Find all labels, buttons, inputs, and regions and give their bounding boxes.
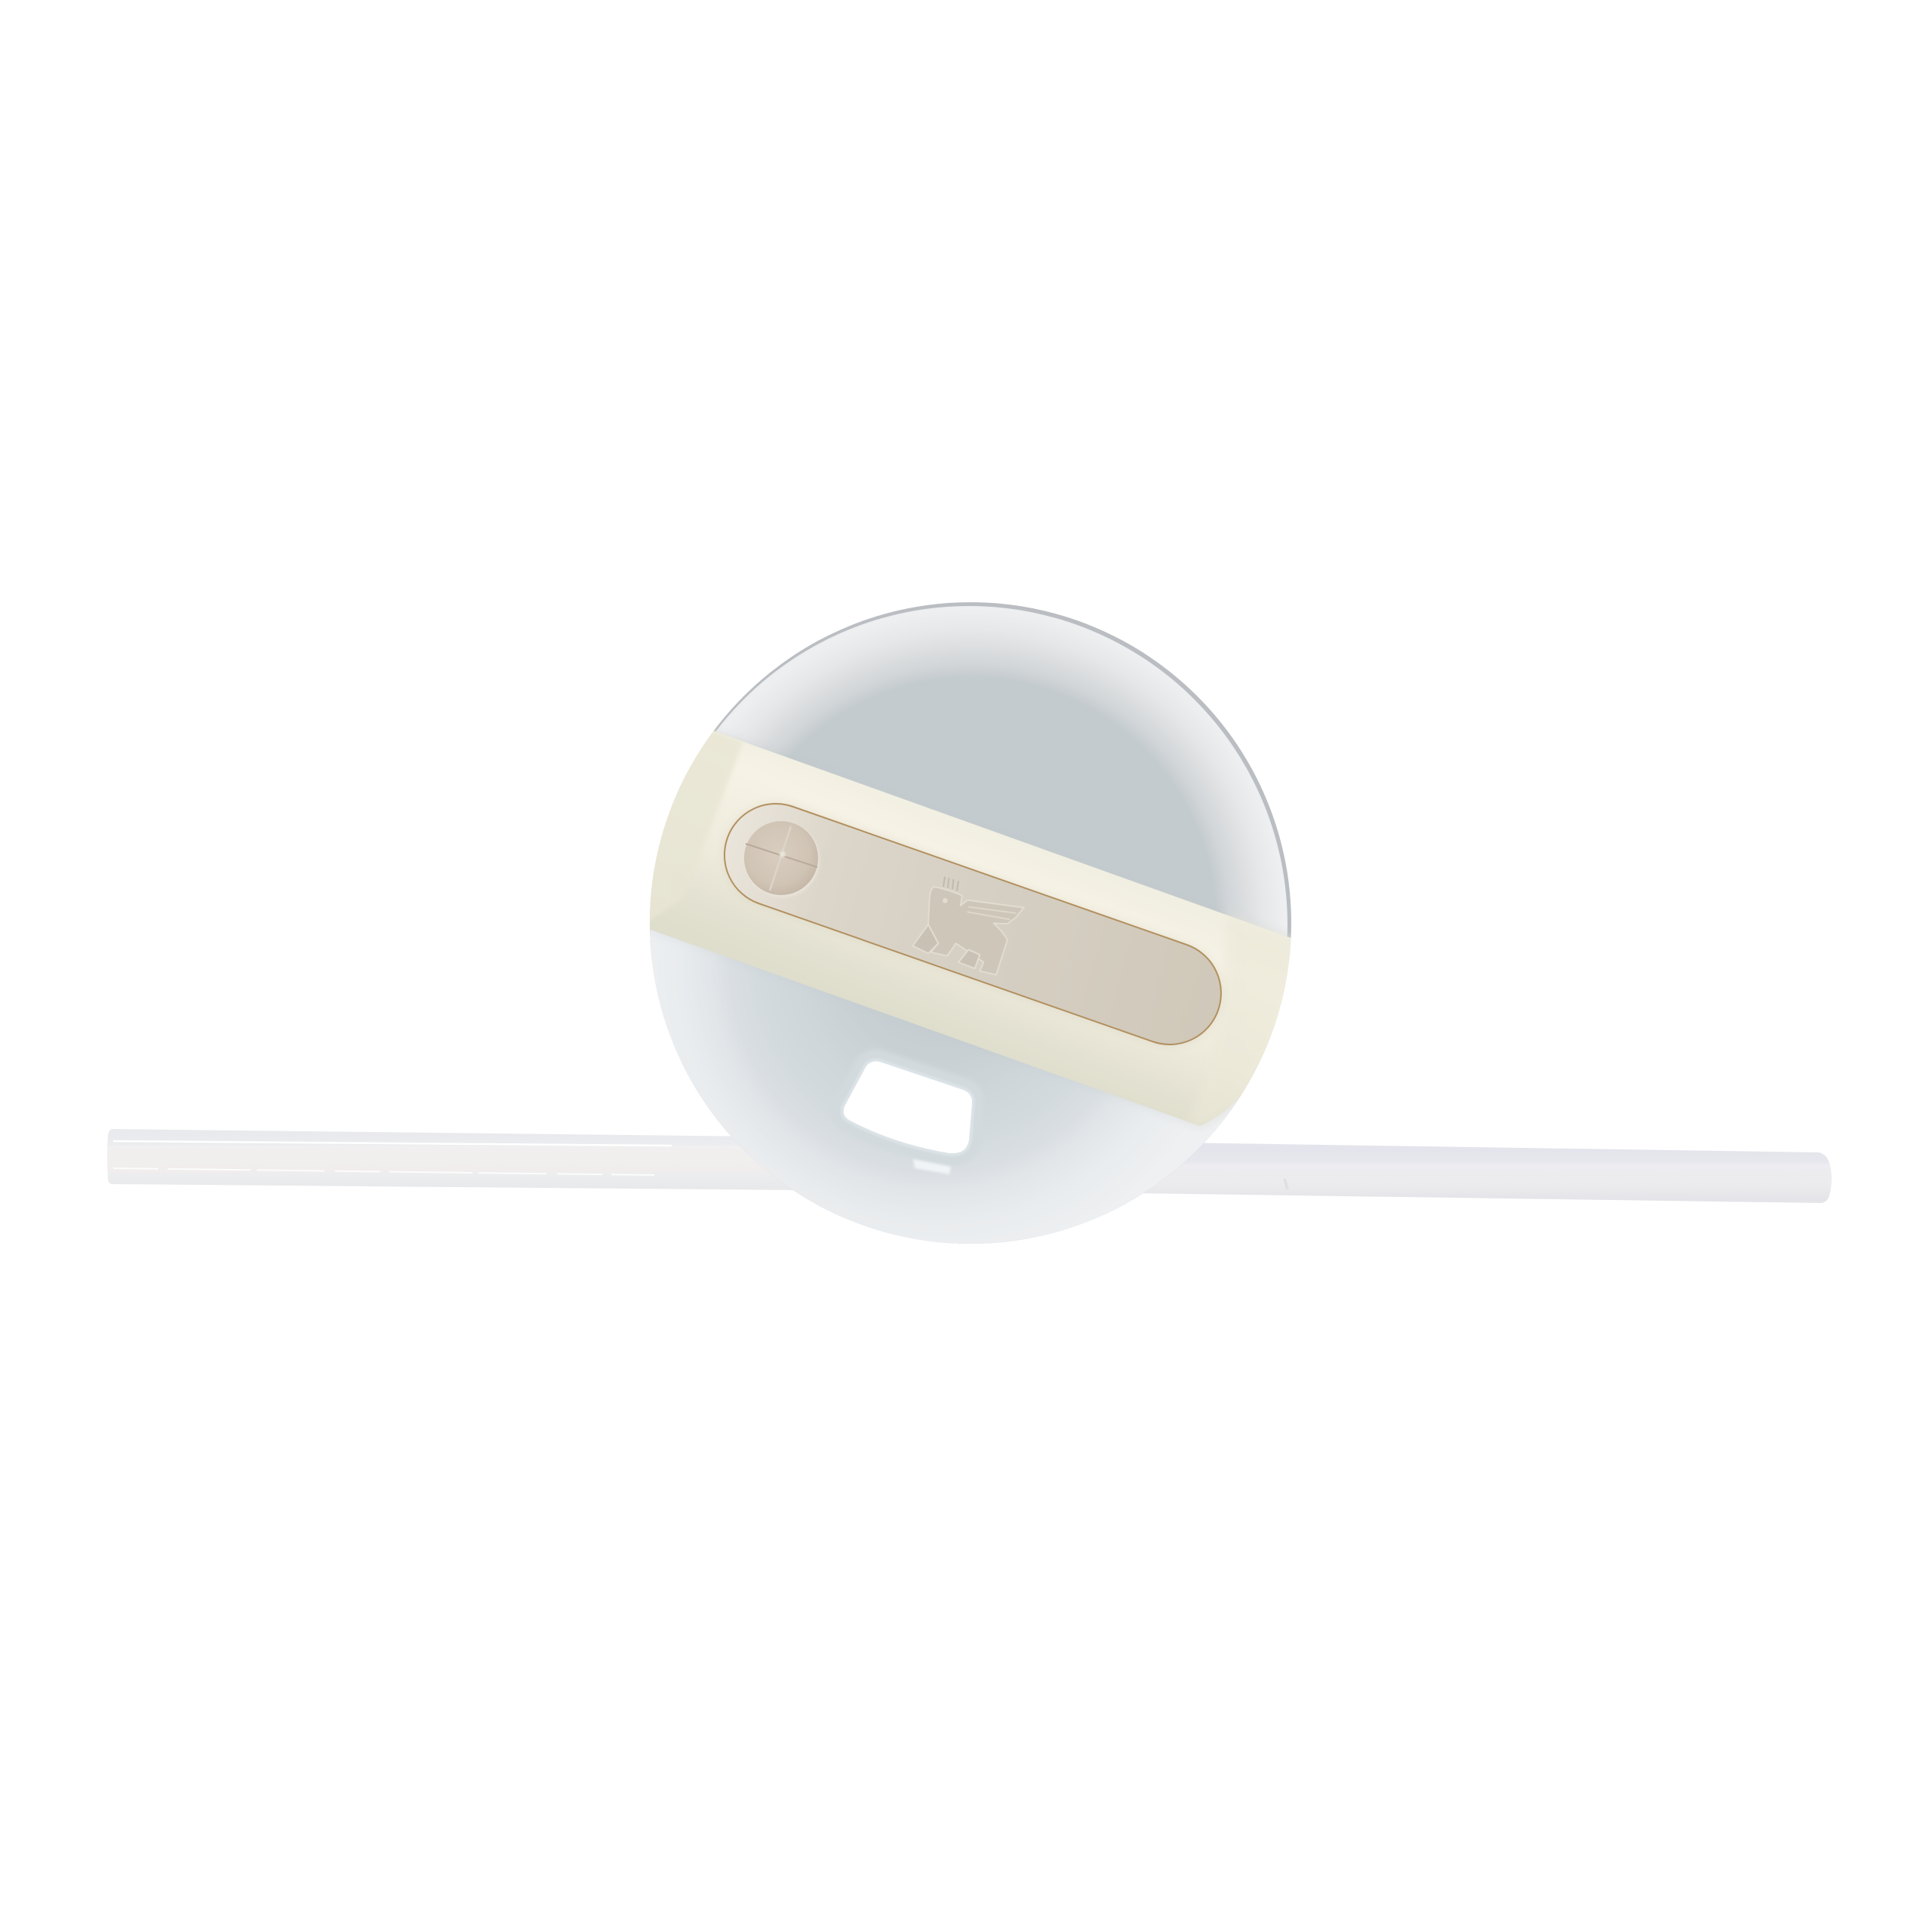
lid <box>650 602 1291 1244</box>
straw: left section <box>107 1129 800 1190</box>
drink opening <box>744 821 820 897</box>
lid lower shading <box>650 930 1240 1244</box>
band left fold <box>651 730 741 916</box>
sliding band <box>619 727 1300 1126</box>
icon: winged bear emboss <box>912 877 1024 975</box>
lid outer ring and upper recessed centre <box>651 606 1287 1243</box>
slider pill <box>724 804 1221 1044</box>
pour opening <box>844 1061 972 1174</box>
straw: right section <box>1132 1143 1832 1203</box>
lid rim crescent <box>650 602 1291 1244</box>
band right fold <box>1230 934 1291 1004</box>
